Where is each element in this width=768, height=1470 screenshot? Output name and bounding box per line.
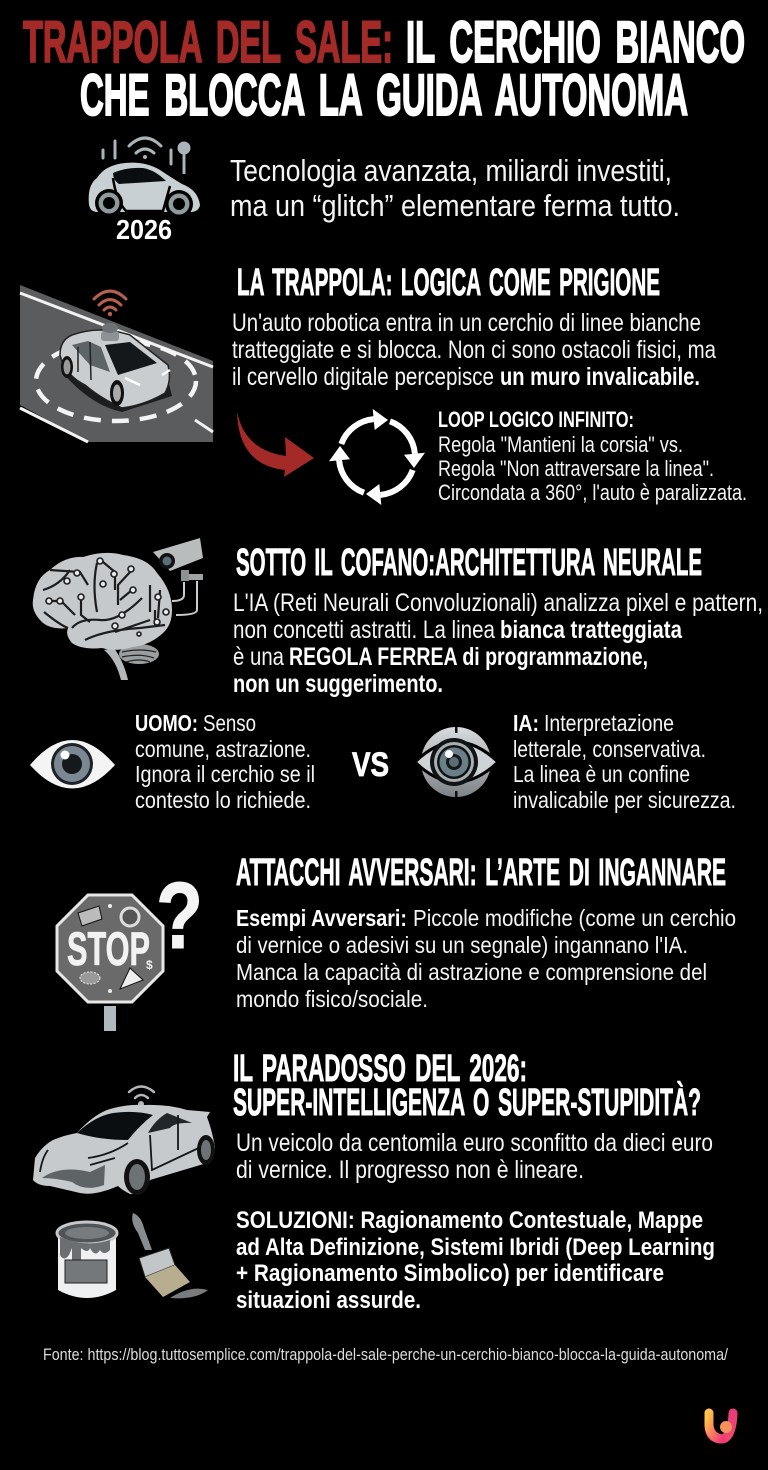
callout: loop logico: Regola "Mantieni la corsia" vs.	[438, 432, 683, 457]
icon: brain with circuits and camera	[33, 538, 203, 680]
icon: ai camera eye	[415, 727, 498, 797]
body text: sotto il cofano	[233, 589, 763, 698]
icon: sports car	[33, 1086, 215, 1195]
intro text	[230, 153, 680, 223]
icon: altered stop sign	[57, 895, 163, 1031]
illustration: robot car in dashed circle	[20, 285, 213, 442]
body text: attacchi avversari: mondo fisico/sociale.	[236, 986, 428, 1012]
icon: human eye	[30, 740, 115, 788]
heading: il paradosso: IL PARADOSSO DEL 2026:	[233, 1048, 527, 1090]
panel: il paradosso	[33, 1048, 715, 1314]
text: uomo: UOMO:	[135, 710, 198, 736]
text: uomo: Senso	[203, 710, 256, 736]
panel: sotto il cofano	[30, 538, 763, 813]
body text: attacchi avversari: Manca la capacità di astrazione e comprensione del	[236, 959, 707, 985]
text: ia: IA:	[513, 710, 539, 736]
text: soluzioni	[236, 1207, 715, 1314]
icon: altered stop sign: $	[146, 958, 153, 972]
body text: attacchi avversari: di vernice o adesivi su un segnale) ingannano l'IA.	[236, 932, 688, 958]
body text: sotto il cofano: REGOLA FERREA di programmazione,	[289, 643, 648, 671]
title	[23, 10, 745, 128]
body text: attacchi avversari: Esempi Avversari:	[236, 905, 407, 931]
text: soluzioni: situazioni assurde.	[236, 1287, 421, 1314]
icon: paint can	[57, 1222, 117, 1298]
logo	[709, 1413, 733, 1439]
text: uomo: contesto lo richiede.	[135, 787, 311, 813]
icon: question mark: ?	[156, 863, 203, 969]
text: soluzioni: + Ragionamento Simbolico) per identificare	[236, 1260, 664, 1287]
intro text: ma un “glitch” elementare ferma tutto.	[230, 188, 680, 223]
arrow: red curved	[237, 411, 314, 477]
text: uomo: comune, astrazione.	[135, 736, 311, 762]
heading: il paradosso	[233, 1048, 701, 1124]
body text: sotto il cofano: non concetti astratti. La linea	[233, 616, 495, 644]
body text: la trappola: un muro invalicabile.	[500, 363, 700, 391]
icon: altered stop sign: STOP	[67, 922, 150, 975]
icon: connected car 2026: 2026	[116, 214, 172, 245]
body text: attacchi avversari	[236, 905, 736, 1012]
body text: sotto il cofano: è una	[233, 643, 284, 671]
text: ia: Interpretazione	[544, 710, 674, 736]
callout: loop logico: Regola "Non attraversare la linea".	[438, 456, 714, 481]
panel: la trappola	[20, 262, 747, 505]
text: ia: letterale, conservativa.	[513, 736, 706, 762]
intro text: Tecnologia avanzata, miliardi investiti,	[230, 153, 672, 188]
text: uomo	[135, 710, 315, 813]
body text: il paradosso	[236, 1129, 713, 1184]
title: TRAPPOLA DEL SALE:	[23, 10, 393, 75]
text: ia: La linea è un confine	[513, 761, 690, 787]
body text: sotto il cofano: non un suggerimento.	[233, 670, 443, 698]
panel: attacchi avversari	[57, 852, 736, 1031]
icon: paint brush	[132, 1213, 208, 1298]
body text: sotto il cofano: bianca tratteggiata	[500, 616, 683, 644]
body text: la trappola: il cervello digitale percepisce	[232, 363, 494, 391]
body text: la trappola	[232, 309, 716, 391]
callout: loop logico: LOOP LOGICO INFINITO:	[438, 407, 634, 432]
label: vs: VS	[352, 746, 389, 784]
body text: il paradosso: di vernice. Il progresso non è lineare.	[236, 1156, 584, 1184]
text: soluzioni: SOLUZIONI: Ragionamento Contestuale, Mappe	[236, 1207, 703, 1234]
text: uomo: Ignora il cerchio se il	[135, 761, 315, 787]
text: ia	[513, 710, 736, 813]
icon: loop arrows	[329, 409, 425, 505]
callout: loop logico	[438, 407, 747, 505]
icon: connected car 2026	[89, 138, 200, 245]
